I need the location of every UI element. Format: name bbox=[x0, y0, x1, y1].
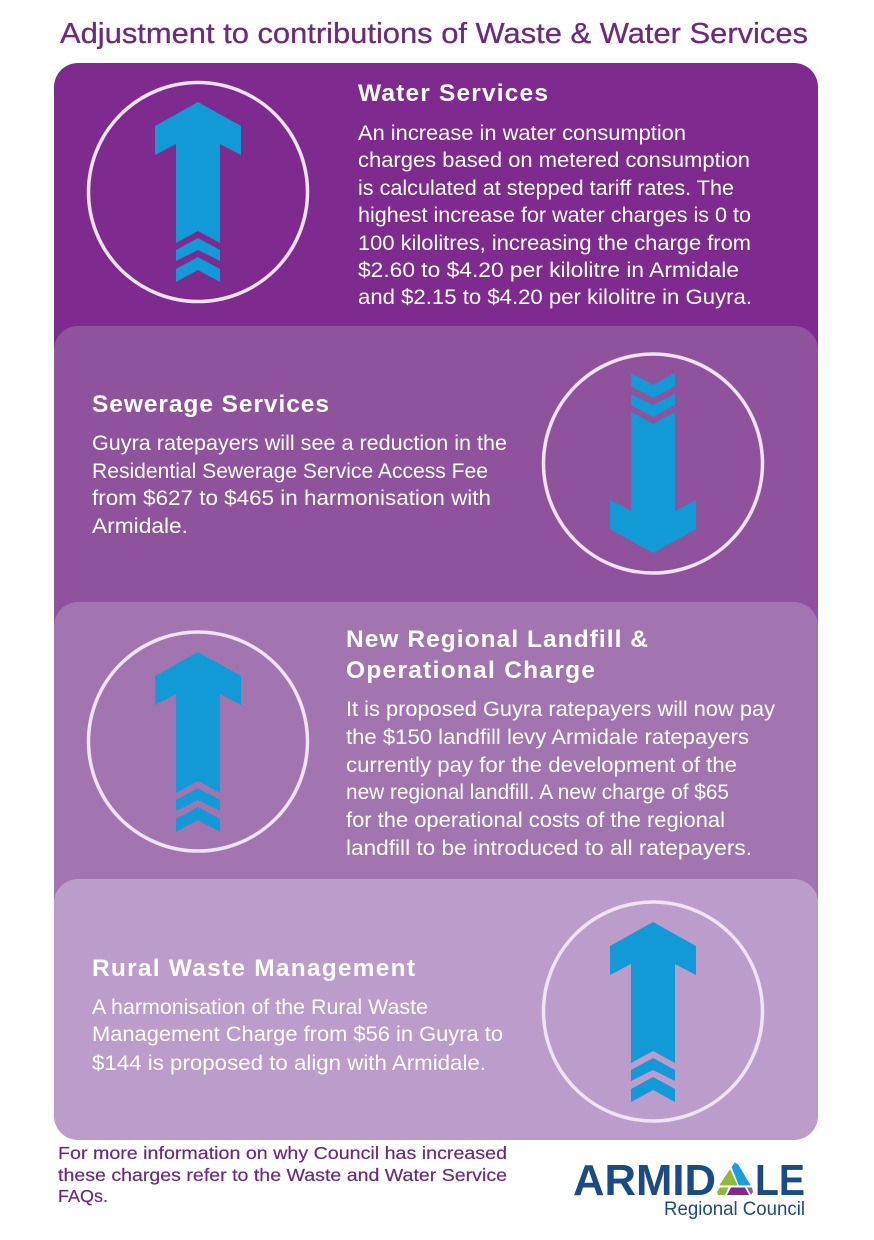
logo: Armidale Regional Council: Regional Council bbox=[664, 1198, 805, 1220]
footer note: FAQs. bbox=[58, 1186, 108, 1206]
panel: water services bbox=[54, 63, 818, 360]
icon: down arrow in circle bbox=[544, 354, 762, 573]
icon: up arrow in circle bbox=[88, 82, 308, 302]
logo: Armidale Regional Council: LE bbox=[755, 1156, 805, 1205]
panel: rural waste management bbox=[54, 879, 818, 1140]
heading: rural waste management: Rural Waste Management bbox=[92, 955, 415, 982]
panel: new regional landfill bbox=[54, 602, 818, 906]
text block: rural waste management: Management Charge from $56 in Guyra to bbox=[92, 1023, 503, 1046]
text block: new regional landfill: It is proposed Guyra ratepayers will now pay bbox=[346, 698, 776, 721]
text block: rural waste management: A harmonisation of the Rural Waste bbox=[92, 996, 428, 1019]
text block: new regional landfill bbox=[346, 698, 776, 860]
text block: new regional landfill: new regional landfill. A new charge of $65 bbox=[346, 781, 729, 804]
text block: water services: and $2.15 to $4.20 per kilolitre in Guyra. bbox=[358, 286, 752, 309]
text block: new regional landfill: the $150 landfill levy Armidale ratepayers bbox=[346, 726, 749, 749]
text block: new regional landfill: landfill to be introduced to all ratepayers. bbox=[346, 837, 752, 860]
text block: water services: $2.60 to $4.20 per kilolitre in Armidale bbox=[358, 259, 739, 282]
heading: water services: Water Services bbox=[358, 80, 548, 107]
text block: water services: highest increase for water charges is 0 to bbox=[358, 204, 751, 227]
text block: new regional landfill: for the operational costs of the regional bbox=[346, 809, 725, 832]
logo: Armidale Regional Council: ARMID bbox=[573, 1156, 716, 1205]
text block: water services: charges based on metered consumption bbox=[358, 149, 750, 172]
footer note: For more information on why Council has increased bbox=[58, 1143, 507, 1163]
heading: new regional landfill: Operational Charge bbox=[346, 657, 595, 684]
text block: water services: 100 kilolitres, increasing the charge from bbox=[358, 232, 751, 255]
text block: rural waste management: $144 is proposed to align with Armidale. bbox=[92, 1052, 486, 1075]
footer note: these charges refer to the Waste and Water Service bbox=[58, 1165, 507, 1185]
heading: sewerage services: Sewerage Services bbox=[92, 391, 329, 418]
icon: up arrow in circle bbox=[544, 902, 762, 1121]
logo: Armidale Regional Council bbox=[573, 1156, 805, 1220]
text block: sewerage services: Residential Sewerage Service Access Fee bbox=[92, 460, 488, 483]
text block: water services bbox=[358, 122, 752, 309]
icon: logo triangle bbox=[717, 1163, 753, 1195]
footer note bbox=[58, 1143, 507, 1206]
title: Adjustment to contributions of Waste & Water Services bbox=[60, 18, 808, 50]
text block: sewerage services: Guyra ratepayers will see a reduction in the bbox=[92, 432, 507, 455]
text block: water services: An increase in water consumption bbox=[358, 122, 686, 145]
text block: water services: is calculated at stepped tariff rates. The bbox=[358, 177, 734, 200]
heading: new regional landfill bbox=[346, 626, 648, 684]
text block: sewerage services: Armidale. bbox=[92, 515, 188, 538]
text block: sewerage services bbox=[92, 432, 507, 538]
text block: rural waste management bbox=[92, 996, 503, 1075]
text block: new regional landfill: currently pay for the development of the bbox=[346, 754, 737, 777]
icon: up arrow in circle bbox=[88, 632, 308, 851]
heading: new regional landfill: New Regional Landfill & bbox=[346, 626, 648, 653]
panel: sewerage services bbox=[54, 326, 818, 630]
text block: sewerage services: from $627 to $465 in harmonisation with bbox=[92, 487, 491, 510]
